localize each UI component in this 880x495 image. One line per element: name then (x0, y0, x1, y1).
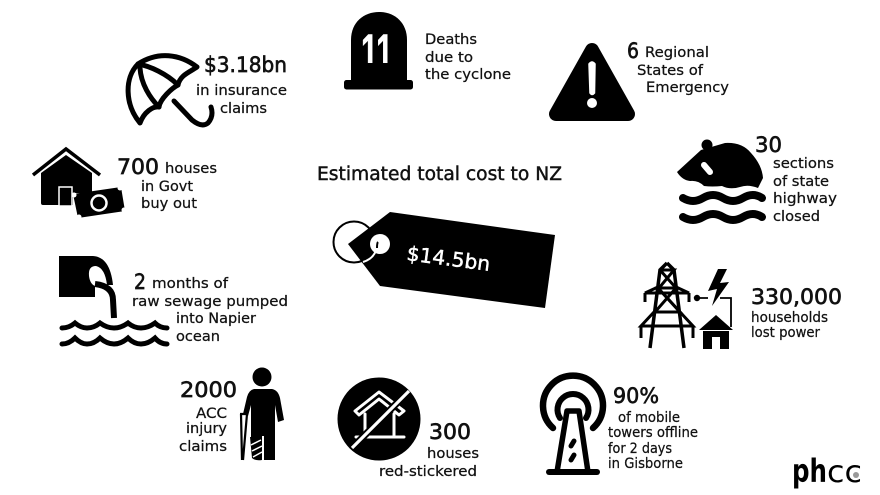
caption: deaths due to the cyclone: the cyclone (425, 67, 511, 83)
figure: 700: 700 (117, 155, 159, 179)
caption: deaths due to the cyclone: due to (425, 50, 473, 66)
caption: sections of state highway closed (773, 156, 837, 225)
caption: houses red-stickered: houses (427, 446, 479, 462)
icon: person with crutch and leg cast (240, 368, 284, 460)
icon: warning triangle (556, 50, 628, 114)
caption: regional states of emergency: States of (637, 63, 704, 79)
panel: insurance claims (128, 53, 287, 125)
caption: of mobile towers offline for 2 days in Gisborne: in Gisborne (608, 456, 683, 472)
icon: radio tower (543, 376, 603, 472)
caption: in insurance claims (196, 83, 287, 117)
caption: months of raw sewage pumped into Napier ocean (132, 276, 288, 345)
caption: households lost power: households (751, 310, 828, 326)
logo: phcc (792, 452, 862, 490)
panel: mobile towers offline (543, 376, 698, 472)
caption: houses in Govt buy out: houses (165, 161, 217, 177)
icon: price tag with ring (334, 212, 555, 308)
panel: ACC injury claims (179, 368, 284, 460)
caption: months of raw sewage pumped into Napier ocean: into Napier (176, 311, 256, 327)
icon: gravestone with 11: 11 (361, 24, 393, 80)
caption: of mobile towers offline for 2 days in Gisborne (608, 410, 698, 472)
logo: phcc: cc (827, 455, 862, 490)
figure: 6: 6 (627, 39, 639, 63)
caption: houses red-stickered (379, 446, 479, 480)
heading: estimated total cost: Estimated total cost to NZ (317, 164, 562, 185)
caption: of mobile towers offline for 2 days in Gisborne: for 2 days (608, 441, 672, 457)
figure: $3.18bn: $3.18bn (204, 53, 287, 77)
panel: deaths (344, 12, 511, 90)
caption: regional states of emergency (637, 45, 729, 96)
caption: deaths due to the cyclone: Deaths (425, 32, 477, 48)
figure: $14.5bn: $14.5bn (405, 241, 492, 276)
caption: sections of state highway closed: of state (773, 174, 829, 190)
caption: sections of state highway closed: closed (773, 209, 820, 225)
caption: houses in Govt buy out: in Govt (141, 179, 193, 195)
caption: houses red-stickered: red-stickered (379, 464, 477, 480)
caption: sections of state highway closed: sections (773, 156, 834, 172)
caption: ACC injury claims: injury (186, 421, 227, 437)
logo: phcc: ph (792, 452, 827, 490)
caption: in insurance claims: claims (220, 101, 267, 117)
caption: ACC injury claims: claims (179, 439, 227, 455)
caption: houses in Govt buy out (141, 161, 217, 212)
icon: house with banknote (33, 149, 126, 220)
panel: houses in Govt buy out (33, 149, 217, 220)
panel: households lost power (641, 263, 842, 349)
caption: months of raw sewage pumped into Napier ocean: months of (152, 276, 229, 292)
caption: regional states of emergency: Emergency (646, 80, 729, 96)
caption: months of raw sewage pumped into Napier ocean: ocean (176, 329, 220, 345)
figure: 30: 30 (755, 133, 782, 157)
caption: households lost power (751, 310, 828, 341)
icon: submerged car with waves (677, 140, 763, 220)
caption: of mobile towers offline for 2 days in Gisborne: of mobile (618, 410, 680, 426)
icon: pylon, lightning and house (641, 263, 733, 349)
caption: months of raw sewage pumped into Napier ocean: raw sewage pumped (132, 294, 288, 310)
caption: of mobile towers offline for 2 days in Gisborne: towers offline (608, 425, 698, 441)
caption: households lost power: lost power (751, 325, 820, 341)
caption: regional states of emergency: Regional (645, 45, 709, 61)
figure: 2000: 2000 (180, 378, 237, 402)
caption: ACC injury claims: ACC (196, 406, 227, 422)
panel: houses red-stickered (338, 378, 479, 480)
icon: umbrella (128, 56, 212, 125)
figure: 300: 300 (429, 420, 471, 444)
icon: gravestone with 11 (344, 12, 413, 90)
panel: price tag (334, 212, 555, 308)
icon: sewage pipe and waves (59, 256, 167, 344)
caption: houses in Govt buy out: buy out (141, 196, 197, 212)
figure: 90%: 90% (613, 384, 659, 408)
figure: 330,000: 330,000 (751, 285, 842, 309)
caption: sections of state highway closed: highway (773, 191, 837, 207)
panel: raw sewage (59, 256, 288, 345)
icon: crossed-out house (338, 378, 420, 460)
caption: deaths due to the cyclone (425, 32, 511, 83)
panel: states of emergency (556, 39, 729, 114)
caption: ACC injury claims (179, 406, 227, 455)
panel: state highway closed (677, 133, 837, 225)
caption: in insurance claims: in insurance (196, 83, 287, 99)
figure: 2: 2 (134, 270, 146, 294)
